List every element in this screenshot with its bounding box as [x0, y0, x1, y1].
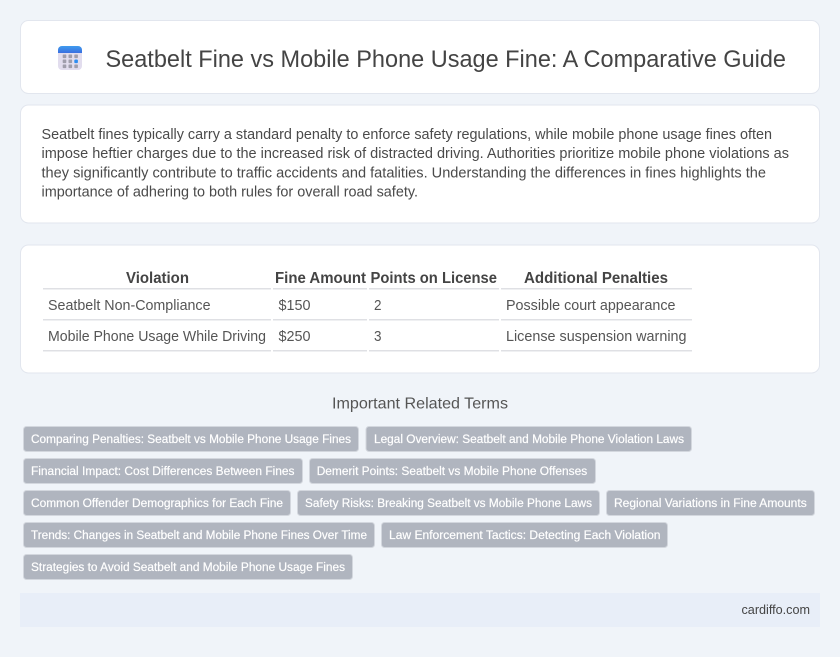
tag: Demerit Points: Seatbelt vs Mobile Phone Offenses [317, 464, 587, 478]
icon: calendar [58, 46, 82, 70]
panel: intro text: impose heftier charges due to the increased risk of distracted driving. Authorities prioritize mobile phone violations as [42, 146, 789, 162]
heading: related terms: Important Related Terms [332, 396, 508, 412]
table row: mobile phone: 3 [374, 329, 382, 345]
tag: Law Enforcement Tactics: Detecting Each Violation [389, 528, 660, 542]
tag [298, 490, 600, 516]
tag [382, 522, 668, 548]
tag [24, 554, 352, 580]
table header: Points on License [370, 270, 497, 287]
table header: Violation [126, 270, 189, 287]
tag: Safety Risks: Breaking Seatbelt vs Mobile Phone Laws [305, 496, 592, 510]
tag: Trends: Changes in Seatbelt and Mobile Phone Fines Over Time [31, 528, 367, 542]
tag: Legal Overview: Seatbelt and Mobile Phone Violation Laws [374, 432, 684, 446]
header panel [20, 20, 820, 94]
table row: seatbelt: Seatbelt Non-Compliance [48, 298, 210, 314]
tag [24, 522, 374, 548]
table header: Fine Amount [275, 270, 366, 287]
table row: mobile phone: $250 [278, 329, 310, 345]
footer: cardiffo.com [742, 602, 810, 617]
tag: Regional Variations in Fine Amounts [614, 496, 807, 510]
tag: Common Offender Demographics for Each Fine [31, 496, 283, 510]
panel: intro text: importance of adhering to both rules for overall road safety. [42, 185, 418, 201]
panel: intro text: they significantly contribute to traffic accidents and fatalities. Understanding the differences in fines highlights the [42, 165, 766, 181]
panel: related term tags [24, 426, 814, 580]
table row: seatbelt: Possible court appearance [506, 298, 676, 314]
panel: intro text: Seatbelt fines typically carry a standard penalty to enforce safety regulations, while mobile phone usage fines often [42, 127, 772, 143]
tag: Comparing Penalties: Seatbelt vs Mobile Phone Usage Fines [31, 432, 351, 446]
title: Seatbelt Fine vs Mobile Phone Usage Fine: A Comparative Guide [106, 46, 786, 73]
tag [310, 458, 596, 484]
table row: mobile phone: License suspension warning [506, 329, 686, 345]
table row: seatbelt: $150 [278, 298, 310, 314]
tag [24, 426, 358, 452]
tag [366, 426, 692, 452]
table row: seatbelt: 2 [374, 298, 382, 314]
table row: mobile phone [43, 329, 692, 352]
tag: Strategies to Avoid Seatbelt and Mobile Phone Usage Fines [31, 560, 345, 574]
panel: intro text [20, 105, 820, 223]
tag [24, 458, 302, 484]
footer [20, 593, 820, 627]
tag: Financial Impact: Cost Differences Between Fines [31, 464, 294, 478]
table header: Additional Penalties [524, 270, 668, 287]
tag [24, 490, 290, 516]
panel: comparison table [20, 245, 820, 373]
tag [606, 490, 814, 516]
table row: mobile phone: Mobile Phone Usage While Driving [48, 329, 266, 345]
table row: seatbelt [43, 298, 692, 320]
table header [43, 270, 692, 290]
